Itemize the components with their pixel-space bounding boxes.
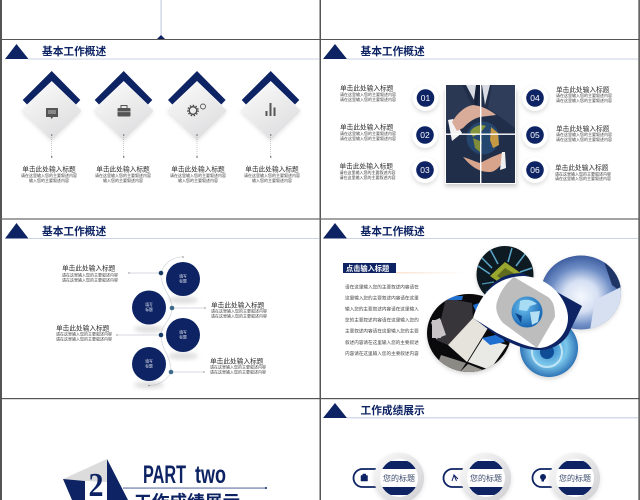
timeline text 3: 单击此处输入标题: [56, 323, 110, 332]
number badge 04: [522, 85, 548, 113]
slide 4 header: 基本工作概述: [360, 225, 425, 238]
text block 06: [555, 163, 611, 181]
diamond card 4 with bar chart icon: 请在这里输入您的主要叙述内容: [244, 172, 300, 178]
timeline text 2: 请在这里输入您的主要叙述内容: [211, 312, 267, 318]
diamond card 3 with gears icon: 请在这里输入您的主要叙述内容: [170, 172, 226, 178]
timeline text 3: [56, 323, 112, 341]
panel: slide 4 image cluster: [323, 223, 638, 379]
image circle: tech rings: [520, 319, 578, 379]
diamond card 3 with gears icon: 输入您的主要叙述内容: [178, 177, 218, 183]
timeline curve: [149, 257, 183, 386]
text block 04: [556, 85, 612, 103]
text block 03: 请在这里输入您的主要叙述内容: [340, 169, 396, 175]
number badge 06: [522, 157, 548, 185]
timeline text 1: 单击此处输入标题: [62, 263, 116, 272]
text block 01: 请在这里输入您的主要叙述内容: [340, 96, 396, 102]
panel: slide 1 four diamonds: [5, 44, 319, 183]
panel: section cover part two: [63, 459, 267, 500]
slide 1 header: [5, 44, 319, 60]
number badge 04: 04: [530, 93, 540, 103]
diamond card 1 with chat icon: 请在这里输入您的主要叙述内容: [21, 172, 77, 178]
slide 6 header: [323, 403, 638, 418]
text block 01: 请在这里输入您的主要叙述内容: [340, 91, 396, 97]
slide 3 header: 基本工作概述: [42, 225, 106, 238]
badge 2: [444, 453, 511, 500]
part label: PART: [143, 461, 186, 489]
text block 03: 单击此处输入标题: [340, 161, 393, 170]
timeline circles: 填写: [179, 274, 187, 278]
timeline text 2: [211, 300, 267, 318]
number badge 01: [412, 85, 438, 113]
diamond card 1 with chat icon: 输入您的主要叙述内容: [29, 177, 69, 183]
timeline text 2: 请在这里输入您的主要叙述内容: [211, 307, 267, 313]
diamond card 4 with bar chart icon: [241, 71, 300, 183]
badge 1: [354, 453, 424, 500]
text block 04: 请在这里输入您的主要叙述内容: [556, 92, 612, 98]
text block 03: [340, 161, 396, 180]
text block 02: 请在这里输入您的主要叙述内容: [340, 130, 396, 136]
text block 04: 单击此处输入标题: [556, 85, 610, 94]
slide 4 header: [323, 223, 638, 239]
badge 2: 您的标题: [470, 473, 502, 483]
image circle: product boxes: [427, 294, 511, 374]
cover divider: [123, 487, 267, 489]
panel: slide 3 circle timeline: [5, 223, 319, 388]
text block 05: [556, 124, 612, 142]
text block 05: 单击此处输入标题: [556, 124, 610, 133]
number badge 02: [412, 122, 438, 150]
slide 6 header: 工作成绩展示: [360, 404, 425, 417]
text block 01: 单击此处输入标题: [340, 83, 394, 92]
timeline text 1: 请在这里输入您的主要叙述内容: [62, 271, 118, 277]
diamond card 4 with bar chart icon: 单击此处输入标题: [245, 164, 299, 173]
text block 06: 单击此处输入标题: [555, 163, 609, 172]
body paragraph: 这里输入您的主要叙述内容请在这里: [345, 294, 419, 301]
number badge 05: [522, 122, 548, 150]
timeline circles: 标题: [145, 364, 153, 368]
text block 02: [340, 122, 396, 141]
diamond card 2 with briefcase icon: [94, 71, 154, 183]
number badge 05: 05: [530, 130, 540, 140]
diamond card 3 with gears icon: 单击此处输入标题: [171, 164, 225, 173]
body paragraph: 输入您的主要叙述内容请在这里输入: [345, 306, 419, 312]
text block 04: 请在这里输入您的主要叙述内容: [556, 97, 612, 103]
diamond card 2 with briefcase icon: 单击此处输入标题: [96, 164, 150, 173]
section number shape: [63, 459, 128, 500]
timeline circles: [132, 262, 200, 388]
body paragraph: [345, 283, 419, 357]
timeline text 4: 单击此处输入标题: [210, 356, 264, 365]
number badge 02: 02: [420, 130, 430, 140]
body paragraph: 主要叙述内容请在这里输入您的主要: [345, 328, 419, 335]
number badge 03: [412, 157, 438, 185]
text block 01: [340, 83, 396, 102]
text block 05: 请在这里输入您的主要叙述内容: [556, 136, 612, 142]
timeline circles: 标题: [179, 334, 187, 340]
timeline text 2: 单击此处输入标题: [211, 300, 265, 309]
slide 2 header: 基本工作概述: [360, 45, 425, 58]
text block 05: 请在这里输入您的主要叙述内容: [556, 131, 612, 137]
slide 1 header: 基本工作概述: [42, 45, 106, 58]
number badge 01: 01: [421, 93, 430, 103]
timeline text 3: 请在这里输入您的主要叙述内容: [56, 335, 112, 341]
diamond card 1 with chat icon: [21, 71, 82, 183]
text block 06: 请在这里输入您的主要叙述内容: [555, 170, 611, 176]
central leaf with globe: [473, 273, 582, 350]
body paragraph: 您的主要叙述内容请在这里输入您的: [345, 317, 419, 324]
panel: slide 6 achievements: [323, 403, 638, 500]
timeline text 1: 请在这里输入您的主要叙述内容: [62, 276, 118, 282]
image circle: circuit chip: [475, 246, 535, 296]
timeline text 4: 请在这里输入您的主要叙述内容: [210, 368, 266, 374]
badge 3: 您的标题: [559, 473, 591, 483]
diamond card 1 with chat icon: 单击此处输入标题: [22, 164, 76, 173]
tag heading: 点击输入标题: [346, 264, 389, 273]
timeline circles: 填写: [179, 330, 187, 334]
timeline circles: 标题: [145, 307, 153, 312]
body paragraph: 请在这里输入您的主要叙述内容请在: [345, 283, 419, 290]
tag heading: [343, 263, 466, 273]
diamond card 4 with bar chart icon: 输入您的主要叙述内容: [252, 177, 292, 183]
timeline circles: 填写: [145, 302, 153, 307]
diamond card 2 with briefcase icon: 输入您的主要叙述内容: [103, 177, 143, 183]
icon: globe: [512, 296, 542, 328]
timeline text 3: 请在这里输入您的主要叙述内容: [56, 330, 112, 336]
timeline circles: 标题: [179, 278, 187, 284]
badge 1: 您的标题: [383, 473, 415, 483]
top connector stub: [157, 0, 165, 39]
image circle: architecture: [541, 250, 625, 331]
text block 03: 请在这里输入您的主要叙述内容: [340, 174, 396, 180]
diamond card 2 with briefcase icon: 请在这里输入您的主要叙述内容: [95, 172, 151, 178]
text block 06: 请在这里输入您的主要叙述内容: [555, 175, 611, 181]
timeline text 4: [210, 356, 266, 374]
badge 3: [532, 453, 600, 500]
timeline text 1: [62, 263, 118, 282]
part label: two: [195, 461, 226, 489]
photo: hands around globe: [445, 84, 517, 187]
timeline circles: 填写: [145, 358, 153, 364]
panel: slide 2 photo and numbered list: [323, 44, 638, 187]
slide 3 header: [5, 223, 319, 239]
timeline text 4: 请在这里输入您的主要叙述内容: [210, 363, 266, 369]
text block 02: 单击此处输入标题: [340, 122, 394, 131]
diamond card 3 with gears icon: [167, 71, 227, 183]
slide 2 header: [323, 44, 638, 60]
timeline connectors and dots: [116, 256, 206, 386]
body paragraph: 叙述内容请在这里输入您的主要叙述: [345, 339, 419, 346]
body paragraph: 内容请在这里输入您的主要叙述内容: [345, 350, 419, 357]
number badge 06: 06: [530, 165, 540, 175]
text block 02: 请在这里输入您的主要叙述内容: [340, 135, 396, 141]
number badge 03: 03: [420, 165, 430, 175]
